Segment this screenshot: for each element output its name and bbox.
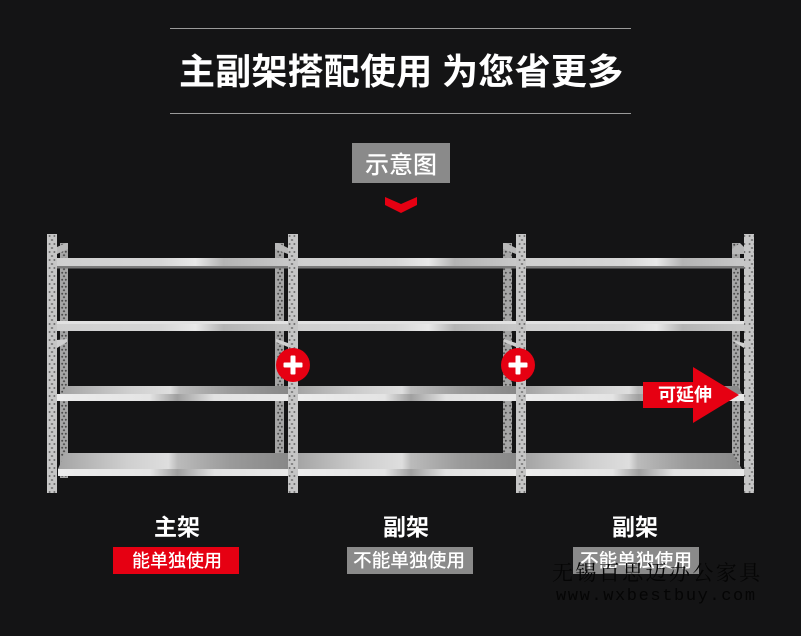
watermark <box>552 561 763 606</box>
front uprights <box>47 234 754 493</box>
label: sub frame 1: 不能单独使用 <box>353 550 465 571</box>
arrow: extendable <box>643 367 739 423</box>
shelf level 1 <box>57 258 744 268</box>
label: sub frame 2: 不能单独使用 <box>580 550 692 571</box>
watermark: 无锡百思迈办公家具 <box>552 561 763 585</box>
icon: plus connector 1 <box>276 348 310 382</box>
brackets and braces <box>57 243 744 348</box>
diagram label <box>352 143 450 183</box>
title: 为您省更多 <box>442 51 624 92</box>
icon: red chevron <box>385 197 417 213</box>
shelf level 3 <box>57 386 744 401</box>
arrow: extendable: 可延伸 <box>658 385 712 405</box>
label: main frame: 主架 <box>154 514 200 540</box>
label: main frame <box>113 514 239 574</box>
label: sub frame 2 <box>573 514 699 574</box>
title: 主副架搭配使用 <box>179 51 432 92</box>
label: sub frame 1: 副架 <box>383 514 429 540</box>
icon: plus connector 2 <box>501 348 535 382</box>
shelf level 4 <box>58 453 744 476</box>
watermark: www.wxbestbuy.com <box>556 587 757 606</box>
shelving diagram <box>47 234 754 493</box>
label: main frame: 能单独使用 <box>132 551 222 571</box>
label: sub frame 2: 副架 <box>612 514 658 540</box>
shelf level 2 <box>57 321 744 331</box>
diagram label: 示意图 <box>365 152 437 179</box>
title <box>170 28 631 114</box>
back uprights <box>60 243 740 478</box>
label: sub frame 1 <box>347 514 473 574</box>
